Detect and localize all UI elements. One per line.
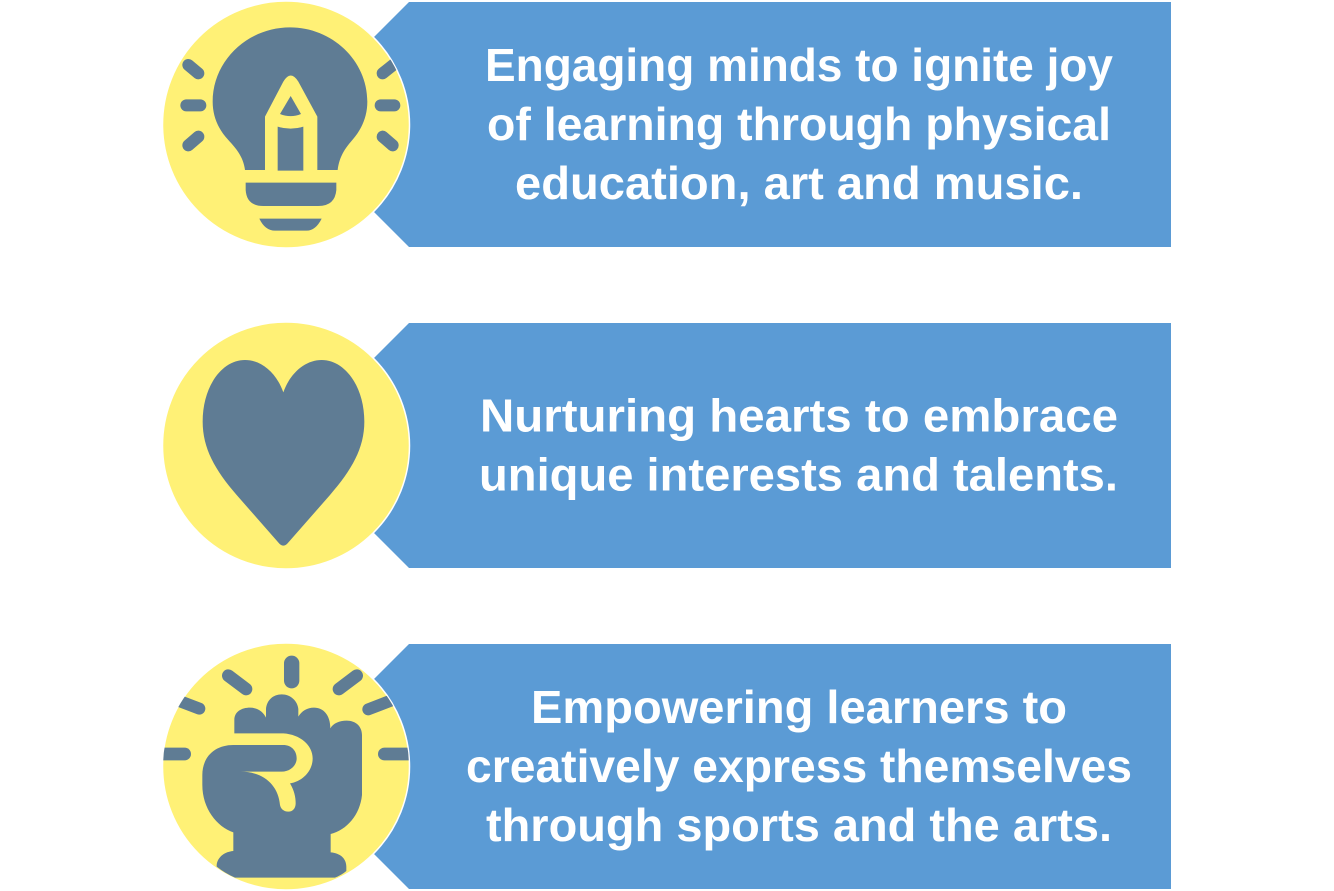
banner: row 2 xyxy=(374,323,1171,568)
panel: nurturing hearts xyxy=(162,322,1171,569)
text: row 3 xyxy=(466,681,1132,851)
text: row 2 xyxy=(479,390,1118,500)
text: row 3: creatively express themselves xyxy=(466,740,1132,792)
text: row 1: of learning through physical xyxy=(487,98,1111,150)
circle: row 3 xyxy=(162,643,410,890)
text: row 1: Engaging minds to ignite joy xyxy=(485,39,1113,91)
banner: row 3 xyxy=(374,644,1171,889)
text: row 3: Empowering learners to xyxy=(531,681,1067,733)
circle: row 1 xyxy=(162,1,410,248)
icon: light bulb with pencil xyxy=(186,27,396,231)
text: row 2: Nurturing hearts to embrace xyxy=(480,390,1118,442)
banner: row 1 xyxy=(374,2,1171,247)
panel: empowering learners xyxy=(157,643,1171,890)
circle: row 2 xyxy=(162,322,410,569)
icon: heart xyxy=(203,360,364,546)
infographic xyxy=(163,2,1171,890)
text: row 1: education, art and music. xyxy=(515,157,1083,209)
text: row 3: through sports and the arts. xyxy=(486,799,1112,851)
text: row 1 xyxy=(485,39,1113,209)
icon: raised fist xyxy=(157,663,413,878)
panel: engaging minds xyxy=(162,1,1171,248)
text: row 2: unique interests and talents. xyxy=(479,448,1118,500)
